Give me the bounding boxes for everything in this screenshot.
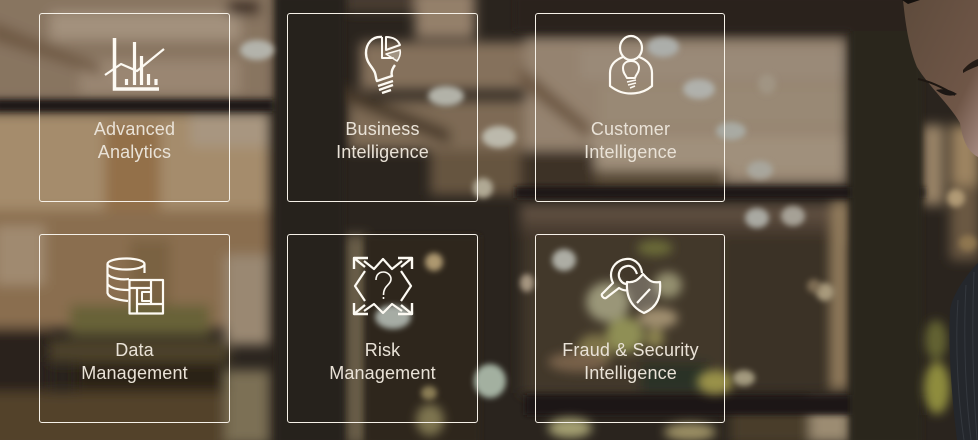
card: Fraud & Security Intelligence <box>535 234 725 423</box>
label: Intelligence <box>584 142 677 162</box>
icon: lightbulb with pie chart <box>364 36 402 94</box>
icon: magnifier and shield <box>600 258 662 314</box>
label <box>81 340 188 383</box>
card: Business Intelligence <box>287 13 478 202</box>
man's face <box>902 0 978 157</box>
label <box>584 119 677 162</box>
label: Fraud & Security <box>562 340 699 360</box>
label <box>329 340 436 383</box>
card: Advanced Analytics <box>39 13 230 202</box>
label <box>562 340 699 383</box>
label: Advanced <box>94 119 175 139</box>
label <box>336 119 429 162</box>
label: Business <box>345 119 420 139</box>
label: Risk <box>365 340 400 360</box>
green foliage glow <box>416 240 950 440</box>
label: Intelligence <box>584 362 677 382</box>
card: Customer Intelligence <box>535 13 725 202</box>
label: Management <box>81 362 188 382</box>
label: Customer <box>591 119 670 139</box>
icon: question mark with outward arrows <box>352 256 414 316</box>
label: Data <box>115 340 154 360</box>
label <box>94 119 175 162</box>
bokeh lights <box>240 37 977 400</box>
icon: person with lightbulb <box>608 34 654 95</box>
card: Data Management <box>39 234 230 423</box>
label: Management <box>329 362 436 382</box>
label: Analytics <box>98 142 171 162</box>
icon: line and bar chart <box>104 38 165 91</box>
label: Intelligence <box>336 142 429 162</box>
icon: database and blocks <box>106 257 164 315</box>
man's suit <box>949 263 978 440</box>
card: Risk Management <box>287 234 478 423</box>
